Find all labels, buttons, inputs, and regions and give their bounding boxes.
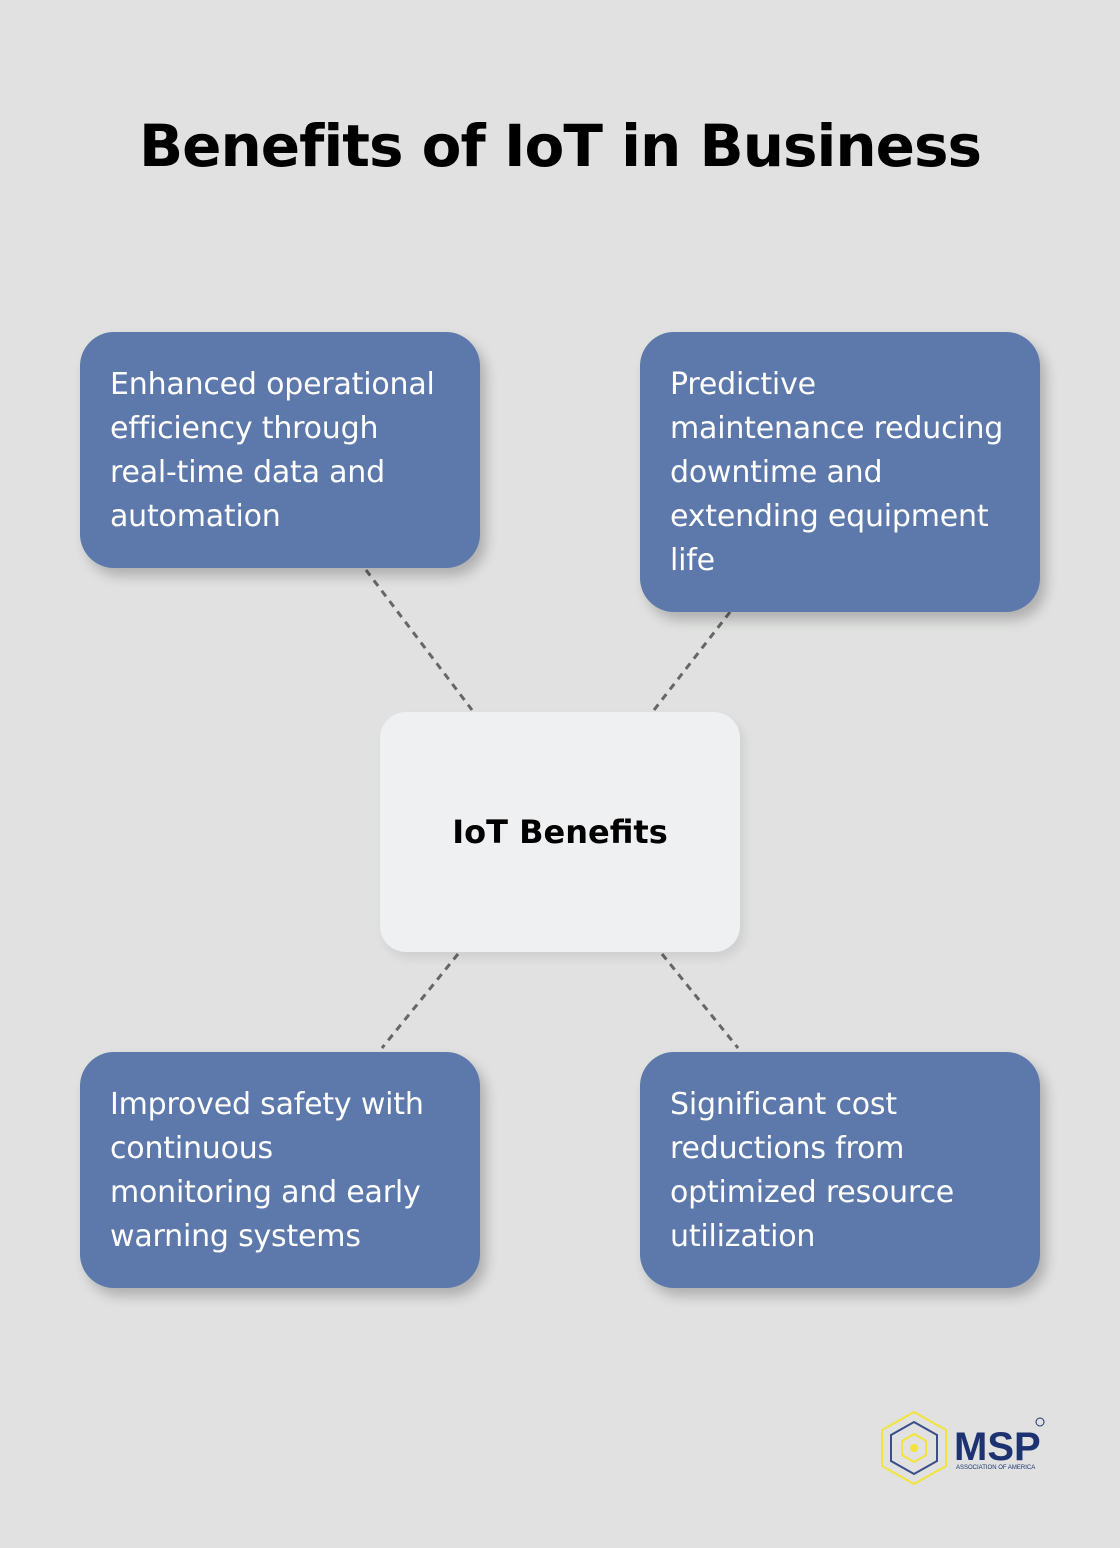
panel: safety: Improved safety with [110,1087,424,1122]
panel: cost reductions [640,1052,1040,1288]
panel: safety: monitoring and early [110,1175,421,1210]
panel: cost reductions: optimized resource [670,1175,954,1210]
panel: operational efficiency [80,332,480,568]
panel: safety: continuous [110,1131,273,1166]
panel: operational efficiency: efficiency through [110,411,378,446]
center node: IoT Benefits [452,813,668,851]
panel: cost reductions: utilization [670,1219,815,1254]
panel: predictive maintenance [640,332,1040,612]
panel: operational efficiency: automation [110,499,281,534]
logo: ASSOCIATION OF AMERICA [956,1465,1035,1471]
panel: operational efficiency: Enhanced operational [110,367,435,402]
title: Benefits of IoT in Business [139,112,981,180]
panel: predictive maintenance: life [670,543,715,578]
panel: predictive maintenance: extending equipment [670,499,988,534]
panel: operational efficiency: real-time data and [110,455,385,490]
center node [380,712,740,952]
panel: safety: warning systems [110,1219,361,1254]
panel: cost reductions: reductions from [670,1131,904,1166]
panel: predictive maintenance: maintenance reducing [670,411,1003,446]
panel: cost reductions: Significant cost [670,1087,897,1122]
logo: MSP [954,1425,1041,1469]
logo [881,1410,1044,1486]
panel: predictive maintenance: downtime and [670,455,882,490]
panel: predictive maintenance: Predictive [670,367,816,402]
panel: safety [80,1052,480,1288]
